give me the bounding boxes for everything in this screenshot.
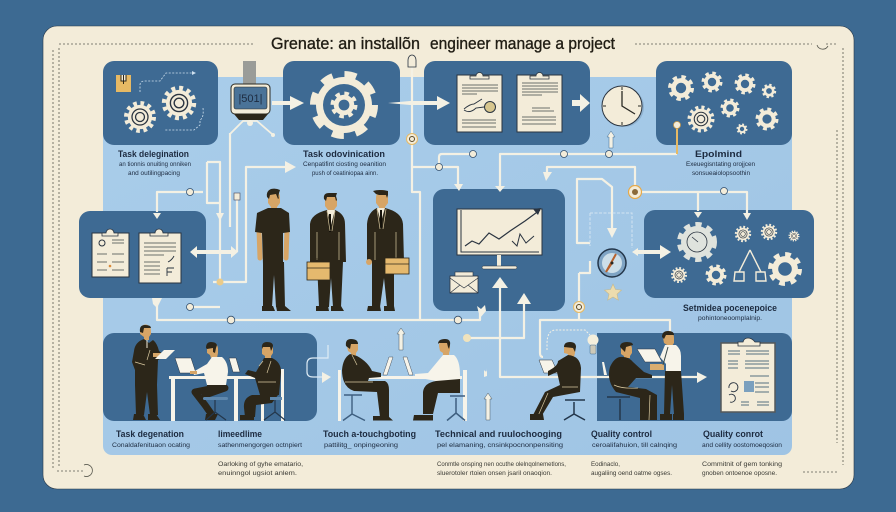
note: commitnit [702,461,782,477]
label: technical and ruulochooging: Technical and ruulochooging [435,429,562,439]
label: task degenation: Conaldafenituaon ocating [112,442,190,449]
gauge device: |501| [238,93,263,105]
icon: report clipboard [721,338,775,412]
panel: office scene right [597,333,792,421]
note: eodinaclo [591,461,672,477]
label: task delegination: Task delegination [118,149,189,159]
label: quality control [591,429,677,449]
light blue field [103,77,792,455]
note: conmtle [437,461,566,477]
icon: gears [127,89,193,130]
note: eodinaclo: Eodinaclo, [591,461,620,468]
note: oarloking: Oarloking of gyhe ematario, [218,461,303,468]
icon: large gear [314,75,374,135]
scene: left desk with two workers [169,342,285,421]
panel: office scene left [103,333,317,421]
panel: gears top left [103,61,218,145]
icon: triangle network [734,250,766,281]
panel: chart [433,189,565,311]
panel: clipboards left [79,211,206,298]
note: commitnit: Commitnit of gem tonking [702,461,782,468]
icon: gear with dial [680,225,714,259]
worker: dark suit facing right [342,339,393,420]
label: epolmind: sonsueaiolopsoothin [692,170,750,177]
gauge device [230,61,275,137]
icon: lightbulb [588,334,598,354]
person: t-shirt engineer [255,189,291,311]
label: touch a-touchgboting [323,429,416,449]
panel: clipboards [424,61,590,145]
label: epolmind: Exeuegisntating orojjcen [686,161,755,168]
icon: yellow box [116,75,131,92]
label: limeedlime [218,429,302,449]
note: oarloking: enuinngol ugsiot anlem. [218,470,297,477]
label: quality control: Quality control [591,429,652,439]
label: task odovinication [303,149,386,177]
arrowheads [152,94,751,420]
label: limeedlime: limeedlime [218,429,262,439]
label: task degenation: Task degenation [116,429,184,439]
scene: middle desk with two workers [338,339,467,421]
note: conmtle: Conmtle onsping nen ocuthe olelnqolnemetlons, [437,461,566,468]
icon: clipboard with magnifier [457,72,502,132]
worker: seated with paper [602,342,664,420]
note: conmtle: sluerotoler rtoien onsen jsaril onaoqion. [437,470,552,477]
label: setmidea pocenepoice: pohintoneoomplalnip. [698,315,762,322]
panel: central gear [283,61,400,145]
title: Grenate: an installõn [271,35,420,53]
label: limeedlime: sathenmengorgen octnpiert [218,442,302,449]
label: setmidea pocenepoice [683,303,777,322]
icon: clipboard notes [139,229,181,283]
scene: presenter [132,325,175,420]
person: suited engineer with briefcase [366,190,409,311]
icon: small gears [672,225,799,284]
scene: right desk with three workers [530,331,684,420]
line chart board [457,208,542,269]
label: task odovinication: Cenpatifint ciosting oeanition [303,161,386,168]
label: quality control: ceroalifahuion, till calnqing [592,442,677,449]
note: eodinaclo: augaliing oend oatme ogses. [591,470,672,477]
label: touch a-touchgboting: pattilitg_ onpingeoning [324,442,399,449]
title [271,35,615,53]
dashed frame [53,44,843,476]
label: quality conrot: Quality conrot [703,429,763,439]
worker: white shirt facing left [413,339,465,420]
worker: dark suit [240,342,285,420]
label: task delegination [118,149,191,177]
icon: compass dial [598,249,626,277]
icon: envelope [450,272,478,293]
icon: clock [602,86,644,127]
icon: clipboard with text [517,72,562,132]
label: task odovinication: push of ceatiniopaa ainn. [312,170,378,177]
label: quality conrot [702,429,782,449]
label: technical and ruulochooging: pel elamaning, cnsinkpocnonpensiting [437,442,564,449]
note: commitnit: gnoben ontoenoe oposne. [702,470,777,477]
label: epolmind: Epolmind [695,149,742,159]
note: oarloking [218,461,303,477]
title: engineer manage a project [430,35,615,53]
connector lines [157,64,747,377]
label: task delegination: and outilingpacing [128,170,180,177]
person: suited engineer with box [307,193,346,311]
label: setmidea pocenepoice: Setmidea pocenepoice [683,303,777,313]
panel: gears top right [656,61,792,145]
label: epolmind [686,149,755,177]
label: task degenation [112,429,190,449]
icon: star badge [604,284,622,300]
label: task delegination: an tionnis onuiting onniken [119,161,191,168]
label: task odovinication: Task odovinication [303,149,385,159]
worker: seated with laptop [530,342,585,420]
label: quality conrot: and cellity oostomoeqosion [702,442,782,449]
person: standing reviewer [660,331,684,420]
label: technical and ruulochooging [435,429,564,449]
icon: gear cluster [670,73,777,134]
panel: gears right [644,210,814,298]
worker: white shirt [190,342,228,420]
connector nodes [186,55,728,342]
label: touch a-touchgboting: Touch a-touchgboting [323,429,416,439]
icon: clipboard checklist [92,229,129,277]
